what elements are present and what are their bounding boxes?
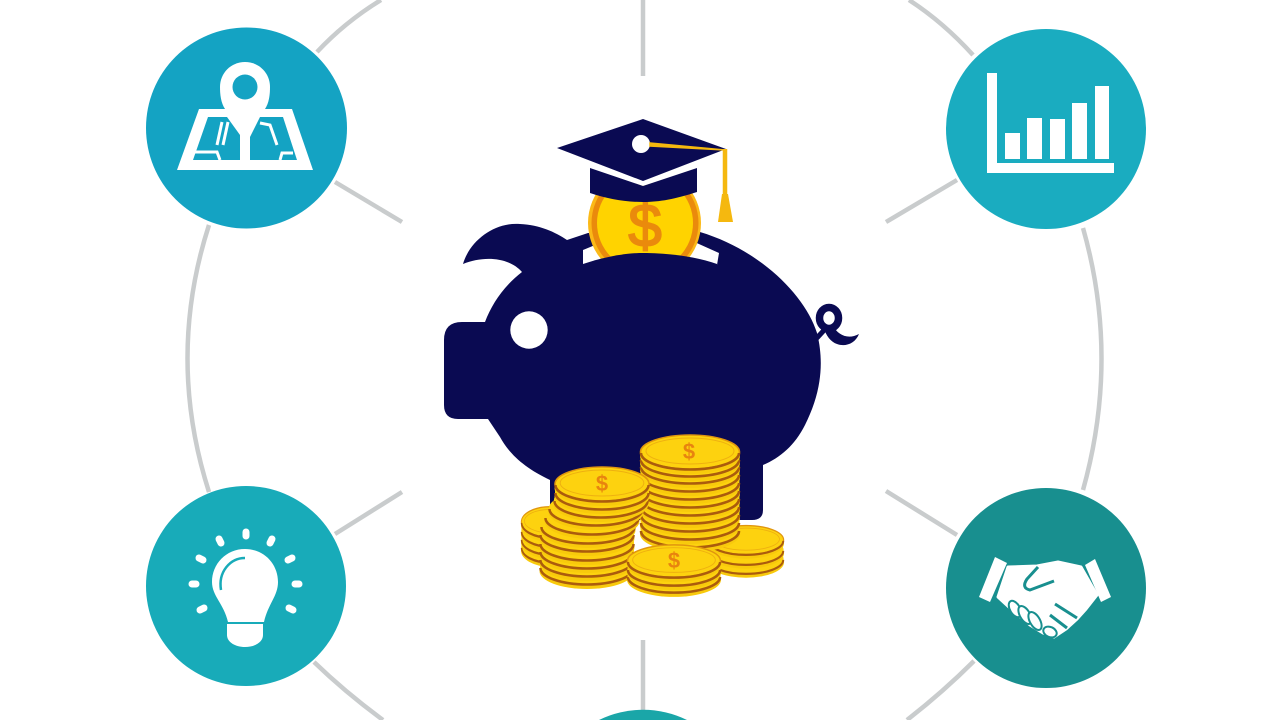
- coin stack: front: $: [668, 548, 680, 573]
- coin stacks: [521, 435, 784, 597]
- pig front edge over slot: [583, 253, 717, 290]
- icon: bar chart: [946, 29, 1146, 229]
- pig tail: [815, 308, 859, 345]
- coin stack: middle: $: [596, 471, 608, 496]
- gap between stacks: [636, 520, 646, 550]
- coin stack: tall: $: [683, 439, 695, 464]
- coin stack: middle: [540, 467, 650, 589]
- icon: handshake: [946, 488, 1146, 688]
- coin stack: tall: [640, 435, 740, 552]
- coin stack: back right: [708, 526, 784, 578]
- coin stack: back left: [521, 507, 579, 567]
- pig body: [444, 224, 821, 520]
- icon: map with location pin: [146, 28, 347, 228]
- pig eye: [510, 311, 548, 349]
- central piggy bank illustration: [444, 119, 859, 520]
- icon: light bulb: [146, 486, 346, 686]
- graduation cap: [557, 119, 733, 222]
- gold coin with dollar sign: $: [628, 192, 662, 259]
- coin stack: front: [627, 545, 721, 597]
- connecting ring and spokes: [188, 0, 1102, 720]
- gold coin with dollar sign: [588, 166, 701, 280]
- coin slot: [583, 240, 719, 265]
- bottom circle partially visible: [599, 710, 687, 720]
